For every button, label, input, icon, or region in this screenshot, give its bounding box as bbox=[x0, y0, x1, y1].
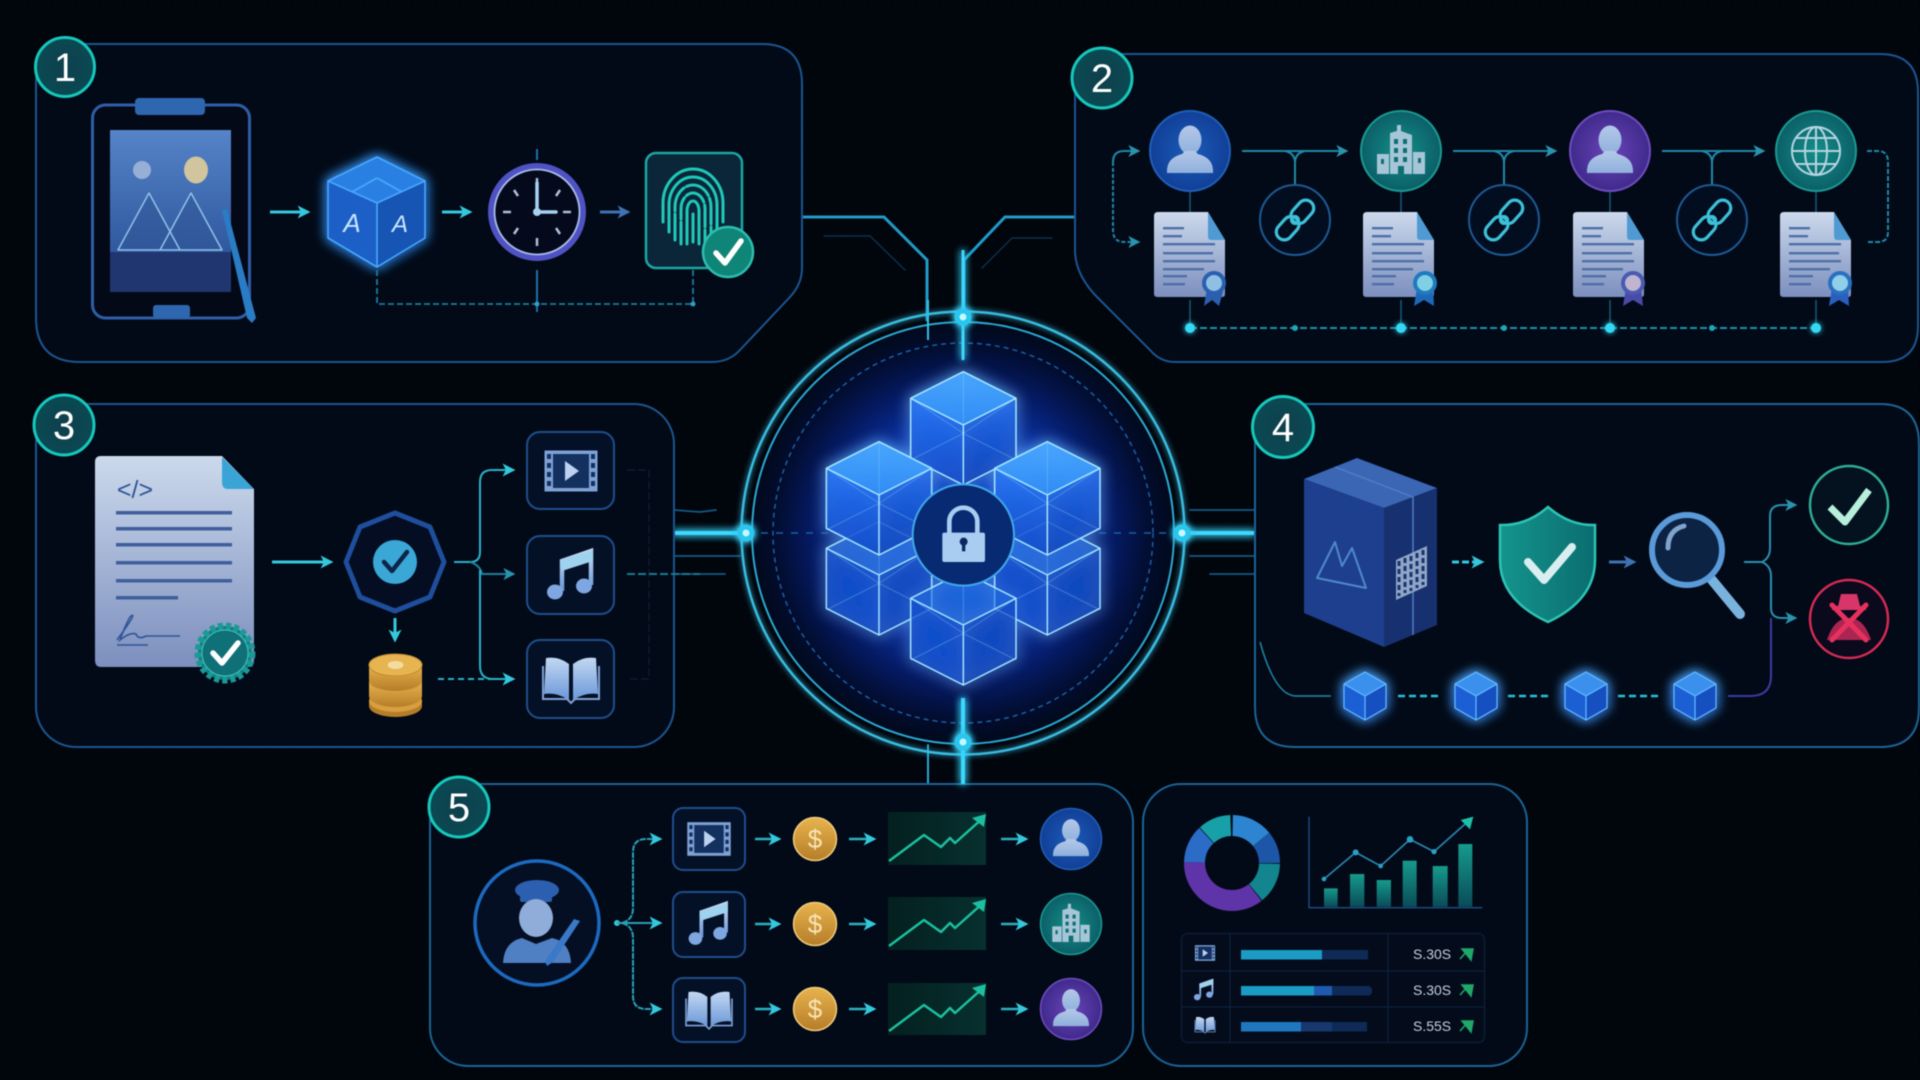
verified seal bbox=[198, 626, 252, 680]
royalty table: S.55S bbox=[1413, 1018, 1451, 1034]
verification fork bbox=[1744, 505, 1795, 618]
panel 6: analytics dashboard bbox=[1143, 784, 1527, 1066]
license: music bbox=[527, 536, 614, 614]
row arrows bbox=[755, 839, 1026, 1009]
donut chart bbox=[1179, 810, 1285, 916]
badge 5 bbox=[429, 777, 489, 837]
contract document bbox=[95, 456, 254, 667]
hub nodes bbox=[740, 311, 1188, 748]
row: film bbox=[673, 808, 745, 870]
coins: $ bbox=[808, 909, 823, 939]
ledger timeline bbox=[1185, 323, 1821, 333]
royalty table: S.30S bbox=[1413, 946, 1451, 962]
owner: person purple bbox=[1570, 111, 1650, 191]
icon: coin stack bbox=[369, 654, 422, 717]
contract document: </> bbox=[117, 476, 153, 504]
badge 3 bbox=[34, 395, 94, 455]
result: authentic bbox=[1810, 466, 1888, 544]
icon: shield check bbox=[1500, 507, 1595, 622]
badge 3: 3 bbox=[53, 404, 75, 448]
icon: tablet with artwork bbox=[92, 98, 256, 323]
dashed anchoring line bbox=[377, 270, 696, 306]
license: film bbox=[527, 432, 614, 509]
cube cluster with lock bbox=[826, 372, 1100, 685]
arrow bbox=[272, 560, 331, 564]
coins: $ bbox=[808, 824, 823, 854]
central blockchain hub bbox=[740, 250, 1188, 784]
badge 4: 4 bbox=[1272, 406, 1294, 450]
icon: padlock bbox=[913, 484, 1014, 586]
icon: asset cube: A bbox=[390, 211, 408, 238]
hub rings bbox=[742, 312, 1184, 754]
badge 2: 2 bbox=[1091, 57, 1113, 101]
badge 5: 5 bbox=[448, 786, 470, 830]
coins bbox=[794, 818, 836, 1030]
owner: person blue bbox=[1150, 111, 1230, 191]
badge 1 bbox=[36, 38, 94, 96]
panel 3: smart contract licensing bbox=[34, 395, 700, 747]
badge 2 bbox=[1072, 48, 1132, 108]
hub spokes bbox=[746, 250, 1182, 784]
trend charts bbox=[888, 812, 986, 1035]
arrow to coins bbox=[394, 618, 396, 640]
badge 1: 1 bbox=[54, 46, 76, 90]
row: book bbox=[673, 978, 745, 1042]
icon: asset cube: A bbox=[341, 208, 361, 238]
arrow bbox=[1609, 560, 1634, 564]
license branches bbox=[438, 470, 700, 679]
panel 4: product authenticity bbox=[1252, 396, 1919, 747]
icon: artist bbox=[475, 861, 599, 985]
owner: institution teal bbox=[1361, 111, 1441, 191]
icon: fingerprint card with check bbox=[646, 153, 753, 277]
panel 2: ownership chain bbox=[1072, 48, 1918, 362]
panel 5: royalty distribution bbox=[429, 777, 1133, 1066]
ownership documents with ribbons bbox=[1154, 212, 1852, 306]
arrow bbox=[600, 210, 628, 214]
royalty table bbox=[1182, 934, 1484, 1042]
chain flow arrows bbox=[1113, 151, 1888, 328]
link icons bbox=[1260, 185, 1747, 255]
coins: $ bbox=[808, 994, 823, 1024]
badge 4 bbox=[1252, 396, 1314, 458]
owner: global teal bbox=[1776, 111, 1856, 191]
hub background glow bbox=[752, 322, 1174, 744]
row: music bbox=[673, 892, 745, 957]
ledger cubes bbox=[1260, 618, 1771, 720]
panel 1: asset capture and fingerprint bbox=[36, 38, 802, 362]
icon: validation octagon bbox=[346, 513, 444, 611]
icon: timestamp clock bbox=[491, 149, 583, 312]
product box with QR bbox=[1304, 458, 1437, 647]
royalty table: S.30S bbox=[1413, 982, 1451, 998]
arrow bbox=[1452, 560, 1482, 564]
bar and line chart bbox=[1309, 817, 1482, 908]
icon: asset cube bbox=[328, 157, 425, 267]
icon: magnifying glass bbox=[1652, 515, 1740, 614]
distribution fork bbox=[614, 839, 660, 1009]
recipients bbox=[1040, 808, 1102, 1040]
arrow bbox=[442, 210, 470, 214]
license: book bbox=[527, 640, 614, 718]
connectors to central hub bbox=[674, 217, 1254, 784]
arrow bbox=[270, 210, 308, 214]
result: counterfeit bbox=[1810, 580, 1888, 658]
